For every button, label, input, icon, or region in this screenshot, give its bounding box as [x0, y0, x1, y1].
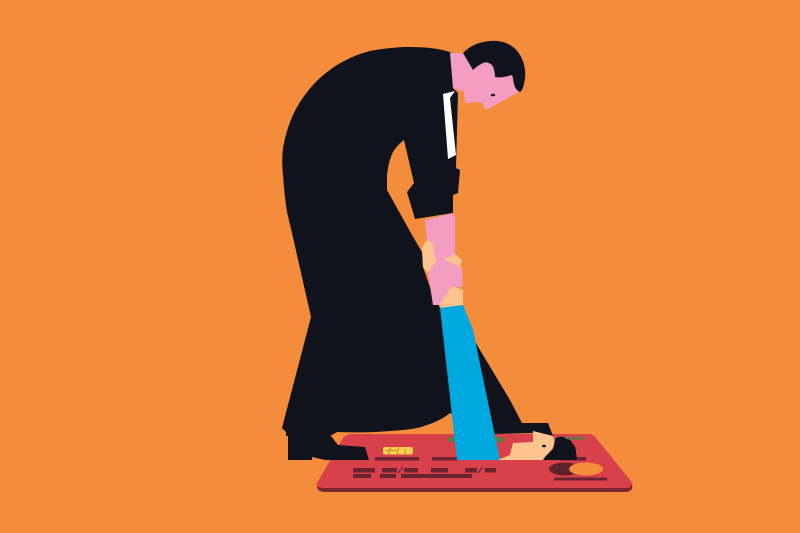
man in black robe: [282, 47, 553, 460]
credit card: [317, 434, 632, 492]
man's face: [450, 53, 519, 110]
person's wrist: [440, 286, 463, 308]
card logo circles: [549, 462, 603, 476]
card green hologram strips: [448, 437, 585, 442]
robe body: [282, 47, 553, 436]
face: [498, 431, 555, 460]
card edge shadow: [317, 436, 632, 492]
white clerical collar strip: [443, 91, 456, 159]
man's hair: [463, 41, 525, 92]
card number bars: [353, 457, 607, 480]
hair: [543, 437, 577, 460]
person's fingers on the wrist: [422, 240, 437, 273]
eye: [542, 445, 546, 447]
man's forearm and hand: [425, 213, 463, 305]
person's blue sleeve: [440, 305, 500, 460]
person's thumb: [444, 254, 462, 267]
left shoe: [288, 431, 369, 460]
card chip: [383, 447, 413, 454]
person's head emerging from card: [498, 431, 577, 460]
card face: [317, 434, 632, 488]
man's eye: [491, 94, 495, 96]
